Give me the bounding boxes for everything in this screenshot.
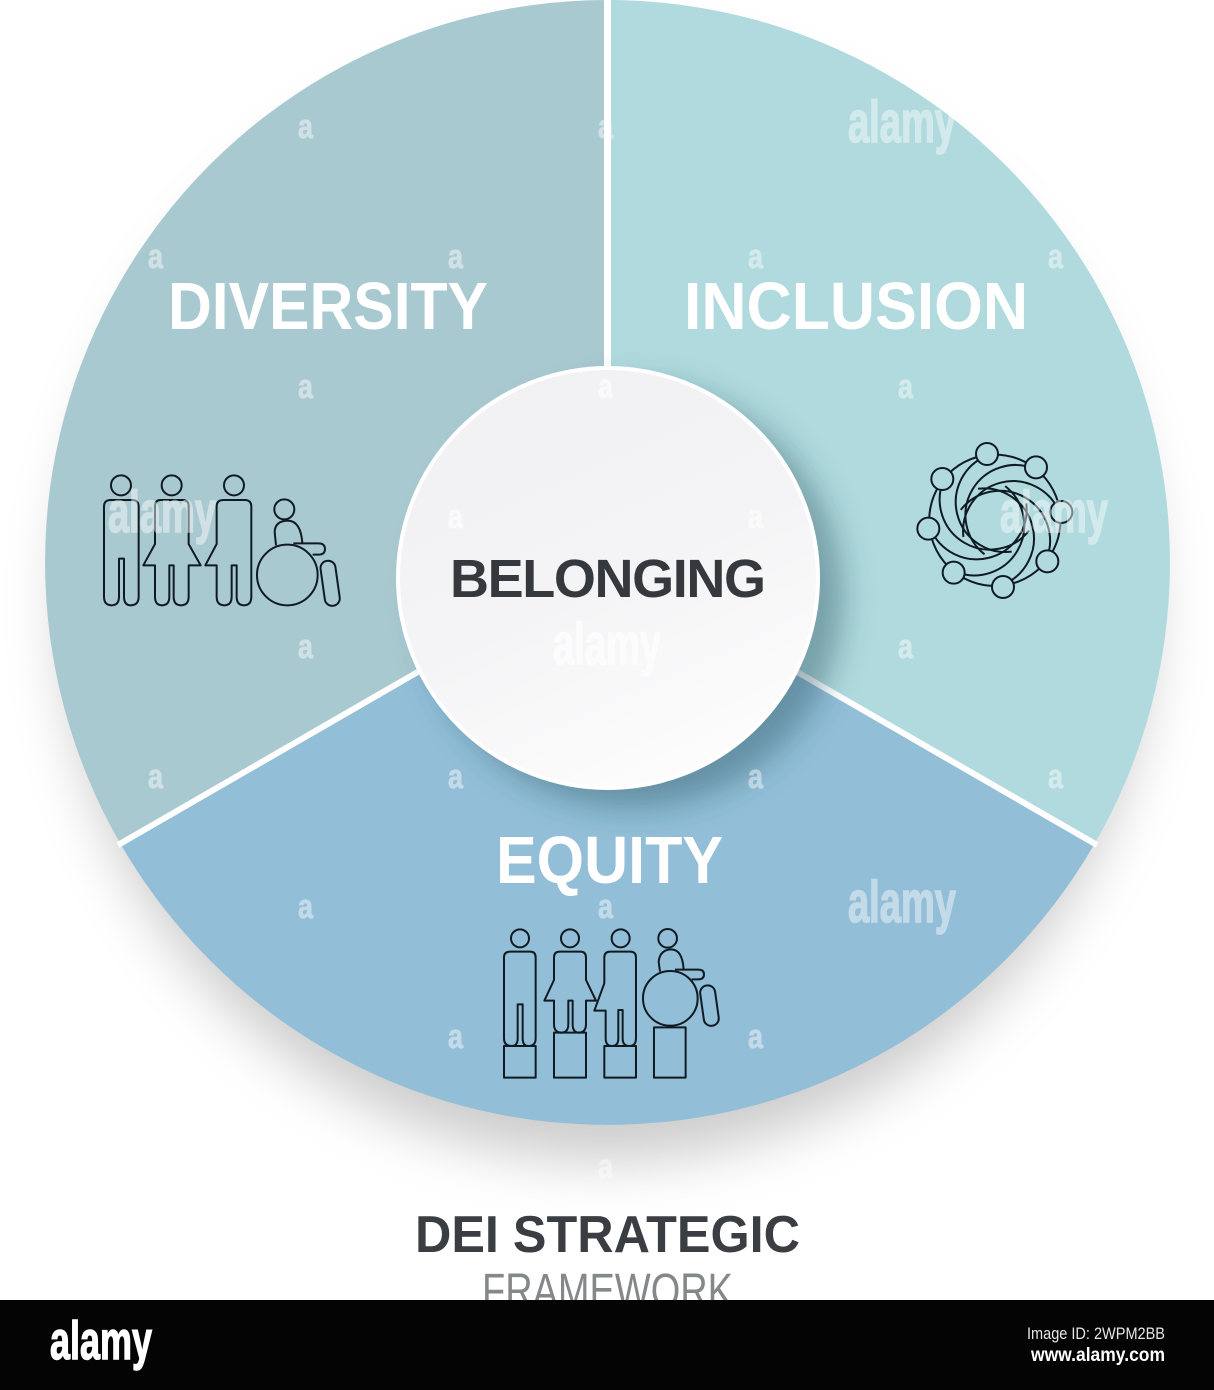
- watermark: alamy: [108, 90, 1108, 1186]
- watermark: alamy: a: [298, 108, 314, 146]
- watermark: alamy: a: [898, 368, 914, 406]
- watermark: alamy: a: [448, 1018, 464, 1056]
- disc watermark letters: a: [748, 498, 764, 536]
- subtitle: FRAMEWORK: [482, 1265, 733, 1318]
- watermark: alamy: a: [748, 1018, 764, 1056]
- alamy logo: alamy: [50, 1311, 152, 1371]
- inclusion heading: INCLUSION: [684, 269, 1028, 344]
- watermark: alamy: a: [148, 238, 164, 276]
- diversity heading: DIVERSITY: [168, 269, 488, 344]
- watermark: alamy: alamy: [108, 480, 216, 545]
- watermark: alamy: a: [1048, 238, 1064, 276]
- belonging label: BELONGING: [450, 549, 766, 609]
- icon: diverse people: [104, 475, 341, 607]
- watermark letters near the center: a: [748, 758, 764, 796]
- center watermark: alamy: [553, 612, 661, 677]
- white dividers: [118, 0, 1097, 845]
- watermark: alamy: a: [298, 628, 314, 666]
- panel: diversity: [45, 0, 607, 844]
- website: www.alamy.com: [1030, 1345, 1165, 1366]
- watermark: alamy: alamy: [848, 870, 956, 935]
- black band: [0, 1300, 1214, 1390]
- watermark: alamy: a: [298, 368, 314, 406]
- watermark letters near the center: [448, 758, 764, 796]
- panel: equity: [120, 562, 1095, 1125]
- center circle shadow: [420, 384, 844, 808]
- center disc: [398, 368, 818, 788]
- panel: inclusion: [608, 0, 1170, 844]
- watermark: alamy: a: [598, 888, 614, 926]
- watermark letters near the center: a: [448, 758, 464, 796]
- watermark: alamy: a: [1048, 758, 1064, 796]
- footer band: [0, 1300, 1214, 1390]
- icon: people on boxes: [504, 929, 720, 1078]
- watermark: alamy: a: [448, 238, 464, 276]
- equity heading: EQUITY: [496, 823, 723, 898]
- watermark: alamy: a: [598, 1148, 614, 1186]
- wheel drop shadow: [62, 50, 1152, 1160]
- watermark: alamy: a: [148, 758, 164, 796]
- disc watermark letters: a: [598, 368, 614, 406]
- watermark: alamy: alamy: [848, 90, 956, 155]
- title: DEI STRATEGIC: [415, 1206, 800, 1264]
- watermark: alamy: a: [298, 888, 314, 926]
- equity sector: [120, 562, 1095, 1125]
- watermark: alamy: a: [598, 108, 614, 146]
- disc watermark letters: a: [448, 498, 464, 536]
- center circle: belonging: [398, 368, 818, 788]
- disc watermark letters: [448, 368, 764, 536]
- icon: circle of people: [917, 443, 1072, 598]
- watermark: alamy: a: [898, 628, 914, 666]
- watermark: alamy: a: [748, 238, 764, 276]
- image id: Image ID: 2WPM2BB: [1027, 1324, 1165, 1343]
- diversity sector: [45, 0, 607, 844]
- inclusion sector: [608, 0, 1170, 844]
- watermark: alamy: alamy: [1000, 480, 1108, 545]
